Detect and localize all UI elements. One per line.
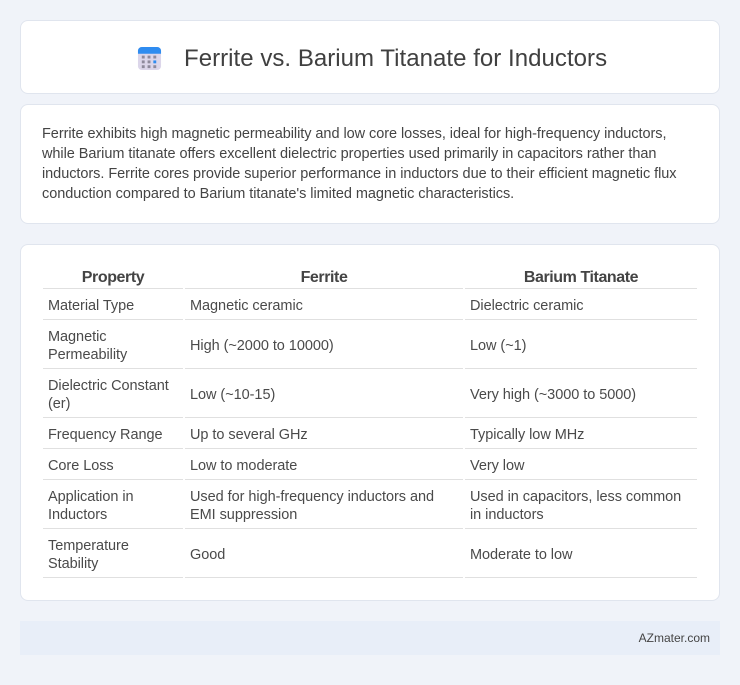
intro paragraph: conduction compared to Barium titanate's limited magnetic characteristics. [42, 186, 514, 202]
row: application in inductors: Inductors [48, 507, 107, 523]
intro paragraph: inductors. Ferrite cores provide superior performance in inductors due to their efficient magnetic flux [42, 166, 677, 182]
row: application in inductors: in inductors [470, 507, 544, 523]
row: core loss: Very low [470, 458, 524, 474]
row: magnetic permeability: Permeability [48, 347, 127, 363]
intro text panel [20, 104, 720, 224]
comparison table [43, 269, 697, 578]
row: application in inductors [48, 489, 681, 523]
row: temperature stability [48, 538, 572, 572]
row: frequency range: Up to several GHz [190, 427, 308, 443]
intro paragraph: Ferrite exhibits high magnetic permeability and low core losses, ideal for high-frequency inductors, [42, 126, 666, 142]
row: core loss: Low to moderate [190, 458, 297, 474]
row: core loss [48, 458, 524, 474]
row: dielectric constant: (er) [48, 396, 70, 412]
table header [82, 269, 638, 286]
row: application in inductors: Application in [48, 489, 134, 505]
comparison table panel [20, 244, 720, 601]
row: material type: Magnetic ceramic [190, 298, 303, 314]
row: material type [48, 298, 584, 314]
title card [20, 20, 720, 94]
table header: Property [82, 269, 144, 286]
footer bar [20, 621, 720, 655]
table header: Ferrite [301, 269, 347, 286]
footer credit: AZmater.com [639, 631, 710, 645]
row: magnetic permeability [48, 329, 526, 363]
row: magnetic permeability: Low (~1) [470, 338, 526, 354]
title: Ferrite vs. Barium Titanate for Inductors [184, 45, 607, 72]
row: temperature stability: Good [190, 547, 225, 563]
row: application in inductors: Used in capacitors, less common [470, 489, 681, 505]
row: frequency range: Frequency Range [48, 427, 163, 443]
row: magnetic permeability: High (~2000 to 10000) [190, 338, 334, 354]
icon: calendar [138, 47, 162, 70]
row: dielectric constant: Very high (~3000 to 5000) [470, 387, 636, 403]
intro paragraph [42, 126, 677, 202]
row: material type: Material Type [48, 298, 134, 314]
row: core loss: Core Loss [48, 458, 114, 474]
row: application in inductors: Used for high-frequency inductors and [190, 489, 434, 505]
row: dielectric constant: Dielectric Constant [48, 378, 169, 394]
row: dielectric constant: Low (~10-15) [190, 387, 275, 403]
row: temperature stability: Stability [48, 556, 98, 572]
row: temperature stability: Moderate to low [470, 547, 572, 563]
row: magnetic permeability: Magnetic [48, 329, 106, 345]
row: frequency range [48, 427, 584, 443]
row: application in inductors: EMI suppression [190, 507, 297, 523]
row: dielectric constant [48, 378, 636, 412]
table header: Barium Titanate [524, 269, 638, 286]
row: frequency range: Typically low MHz [470, 427, 584, 443]
row: temperature stability: Temperature [48, 538, 129, 554]
intro paragraph: while Barium titanate offers excellent dielectric properties used primarily in capacitors rather than [42, 146, 656, 162]
row: material type: Dielectric ceramic [470, 298, 584, 314]
